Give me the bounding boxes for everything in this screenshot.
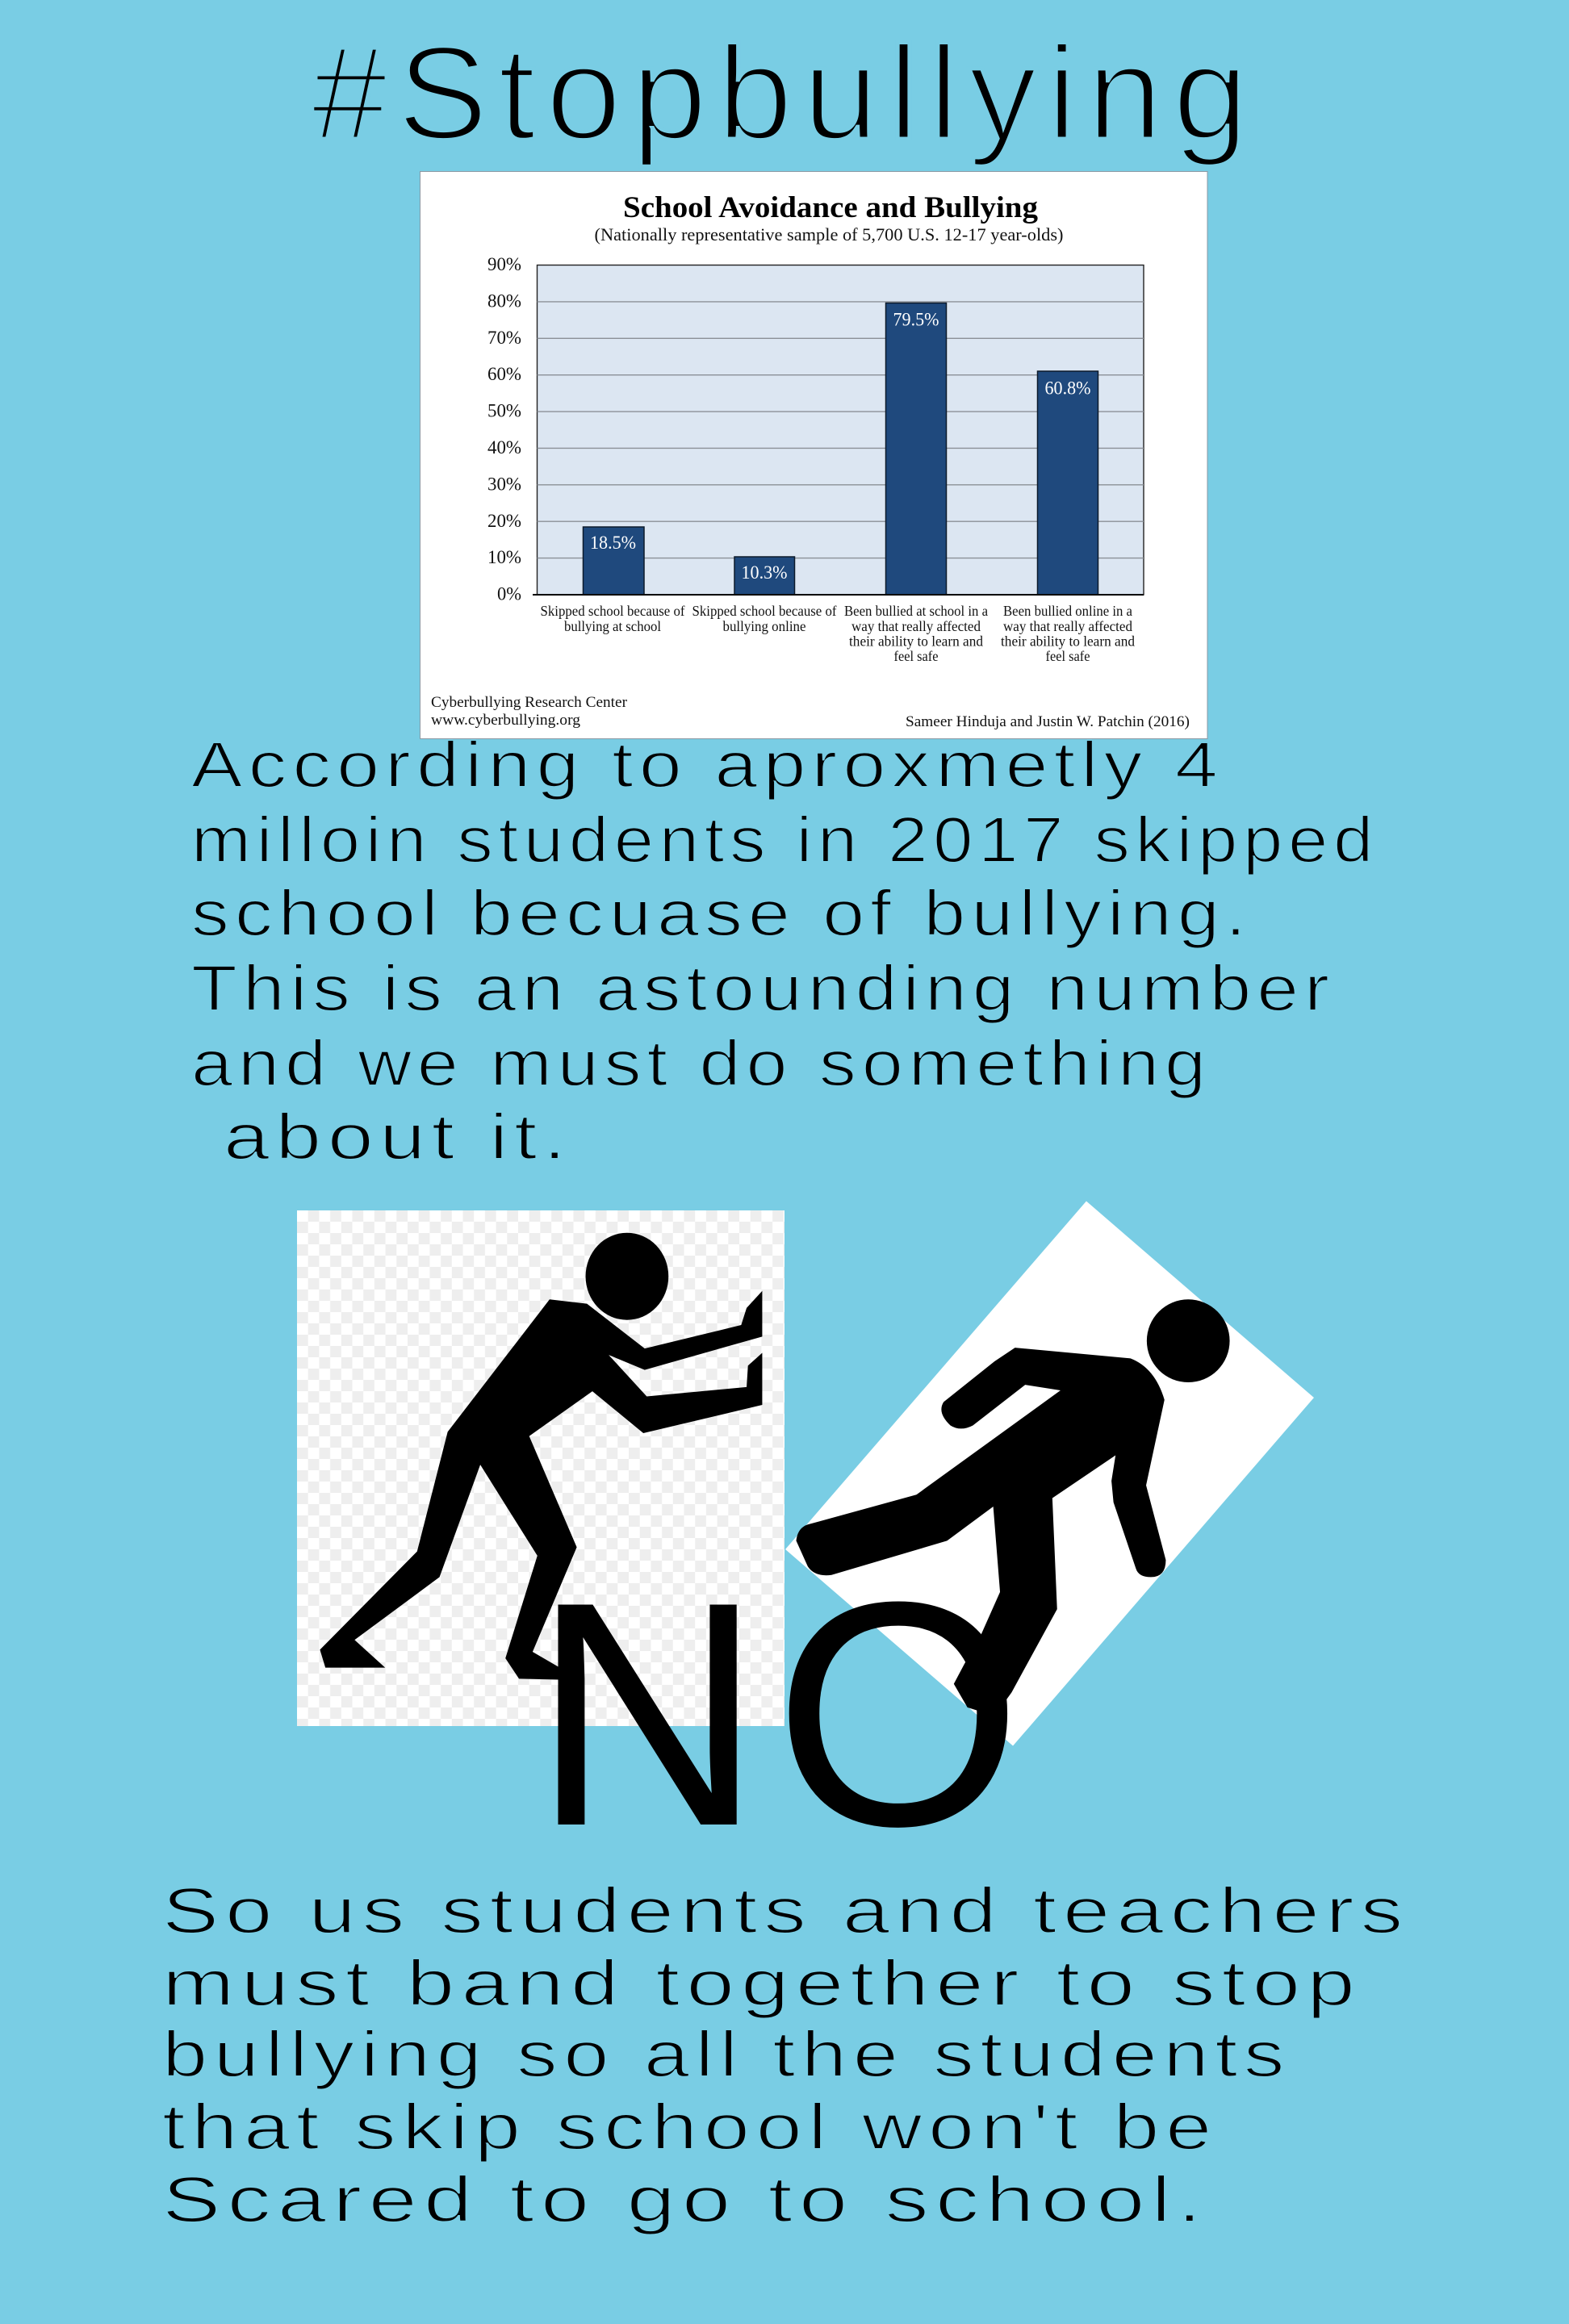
text block: skipped school statistic: This is an astounding number	[191, 952, 1335, 1024]
y axis labels: 50%	[487, 401, 521, 421]
icon: person being tripped	[785, 1202, 1314, 1746]
y axis labels: 30%	[487, 474, 521, 494]
chart title: School Avoidance and Bullying	[623, 191, 1039, 224]
category labels: feel safe	[894, 648, 939, 664]
bar value labels: 18.5%	[590, 533, 636, 553]
category labels: feel safe	[1046, 648, 1090, 664]
text block: call to action: that skip school won't be	[162, 2091, 1218, 2163]
bars	[583, 303, 1098, 595]
category labels: bullying at school	[564, 618, 661, 634]
category labels: Been bullied at school in a	[844, 603, 988, 619]
text block: call to action: must band together to stop	[162, 1947, 1362, 2019]
y axis labels: 80%	[487, 290, 521, 311]
text block: call to action: Scared to go to school.	[162, 2163, 1208, 2235]
bar value labels: 79.5%	[893, 310, 939, 329]
category labels: way that really affected	[851, 618, 981, 634]
y axis labels: 70%	[487, 328, 521, 348]
category labels: their ability to learn and	[1001, 633, 1135, 649]
y axis labels: 10%	[487, 547, 521, 567]
y axis labels	[487, 254, 521, 604]
plot background and grid	[538, 265, 1144, 595]
text block: call to action	[162, 1875, 1409, 2235]
bar value labels: 10.3%	[741, 562, 788, 583]
text block: skipped school statistic	[191, 729, 1379, 1172]
text block: skipped school statistic: about it.	[224, 1101, 572, 1172]
category labels: Been bullied online in a	[1003, 603, 1132, 619]
source credit: Cyberbullying Research Center	[431, 694, 628, 711]
icon: person pushing	[297, 1210, 784, 1726]
category labels: Skipped school because of	[692, 603, 837, 619]
bar value labels	[590, 310, 1091, 583]
text block: call to action: bullying so all the students	[162, 2018, 1291, 2090]
category labels	[541, 603, 1135, 664]
source credit	[431, 694, 1190, 730]
source credit: Sameer Hinduja and Justin W. Patchin (2016)	[906, 713, 1190, 730]
text block: call to action: So us students and teachers	[162, 1875, 1409, 1946]
category labels: bullying online	[723, 618, 806, 634]
text block: skipped school statistic: and we must do something	[191, 1027, 1211, 1099]
text block: skipped school statistic: school becuase of bullying.	[191, 877, 1252, 949]
category labels: way that really affected	[1003, 618, 1132, 634]
y axis labels: 20%	[487, 511, 521, 531]
y axis labels: 0%	[497, 584, 521, 604]
source credit: www.cyberbullying.org	[431, 712, 581, 729]
x axis line	[533, 594, 1144, 596]
y axis labels: 40%	[487, 437, 521, 458]
bar value labels: 60.8%	[1044, 378, 1091, 399]
chart subtitle: (Nationally representative sample of 5,700 U.S. 12-17 year-olds)	[594, 224, 1064, 245]
text block: skipped school statistic: According to aproxmetly 4	[191, 729, 1224, 800]
category labels: their ability to learn and	[849, 633, 983, 649]
title: #Stopbullying	[312, 19, 1258, 167]
big NO label: NO	[532, 1536, 1034, 1892]
text block: skipped school statistic: milloin students in 2017 skipped	[191, 804, 1379, 876]
panel: bar chart image	[420, 171, 1207, 739]
y axis labels: 90%	[487, 254, 521, 274]
y axis labels: 60%	[487, 364, 521, 384]
category labels: Skipped school because of	[541, 603, 685, 619]
